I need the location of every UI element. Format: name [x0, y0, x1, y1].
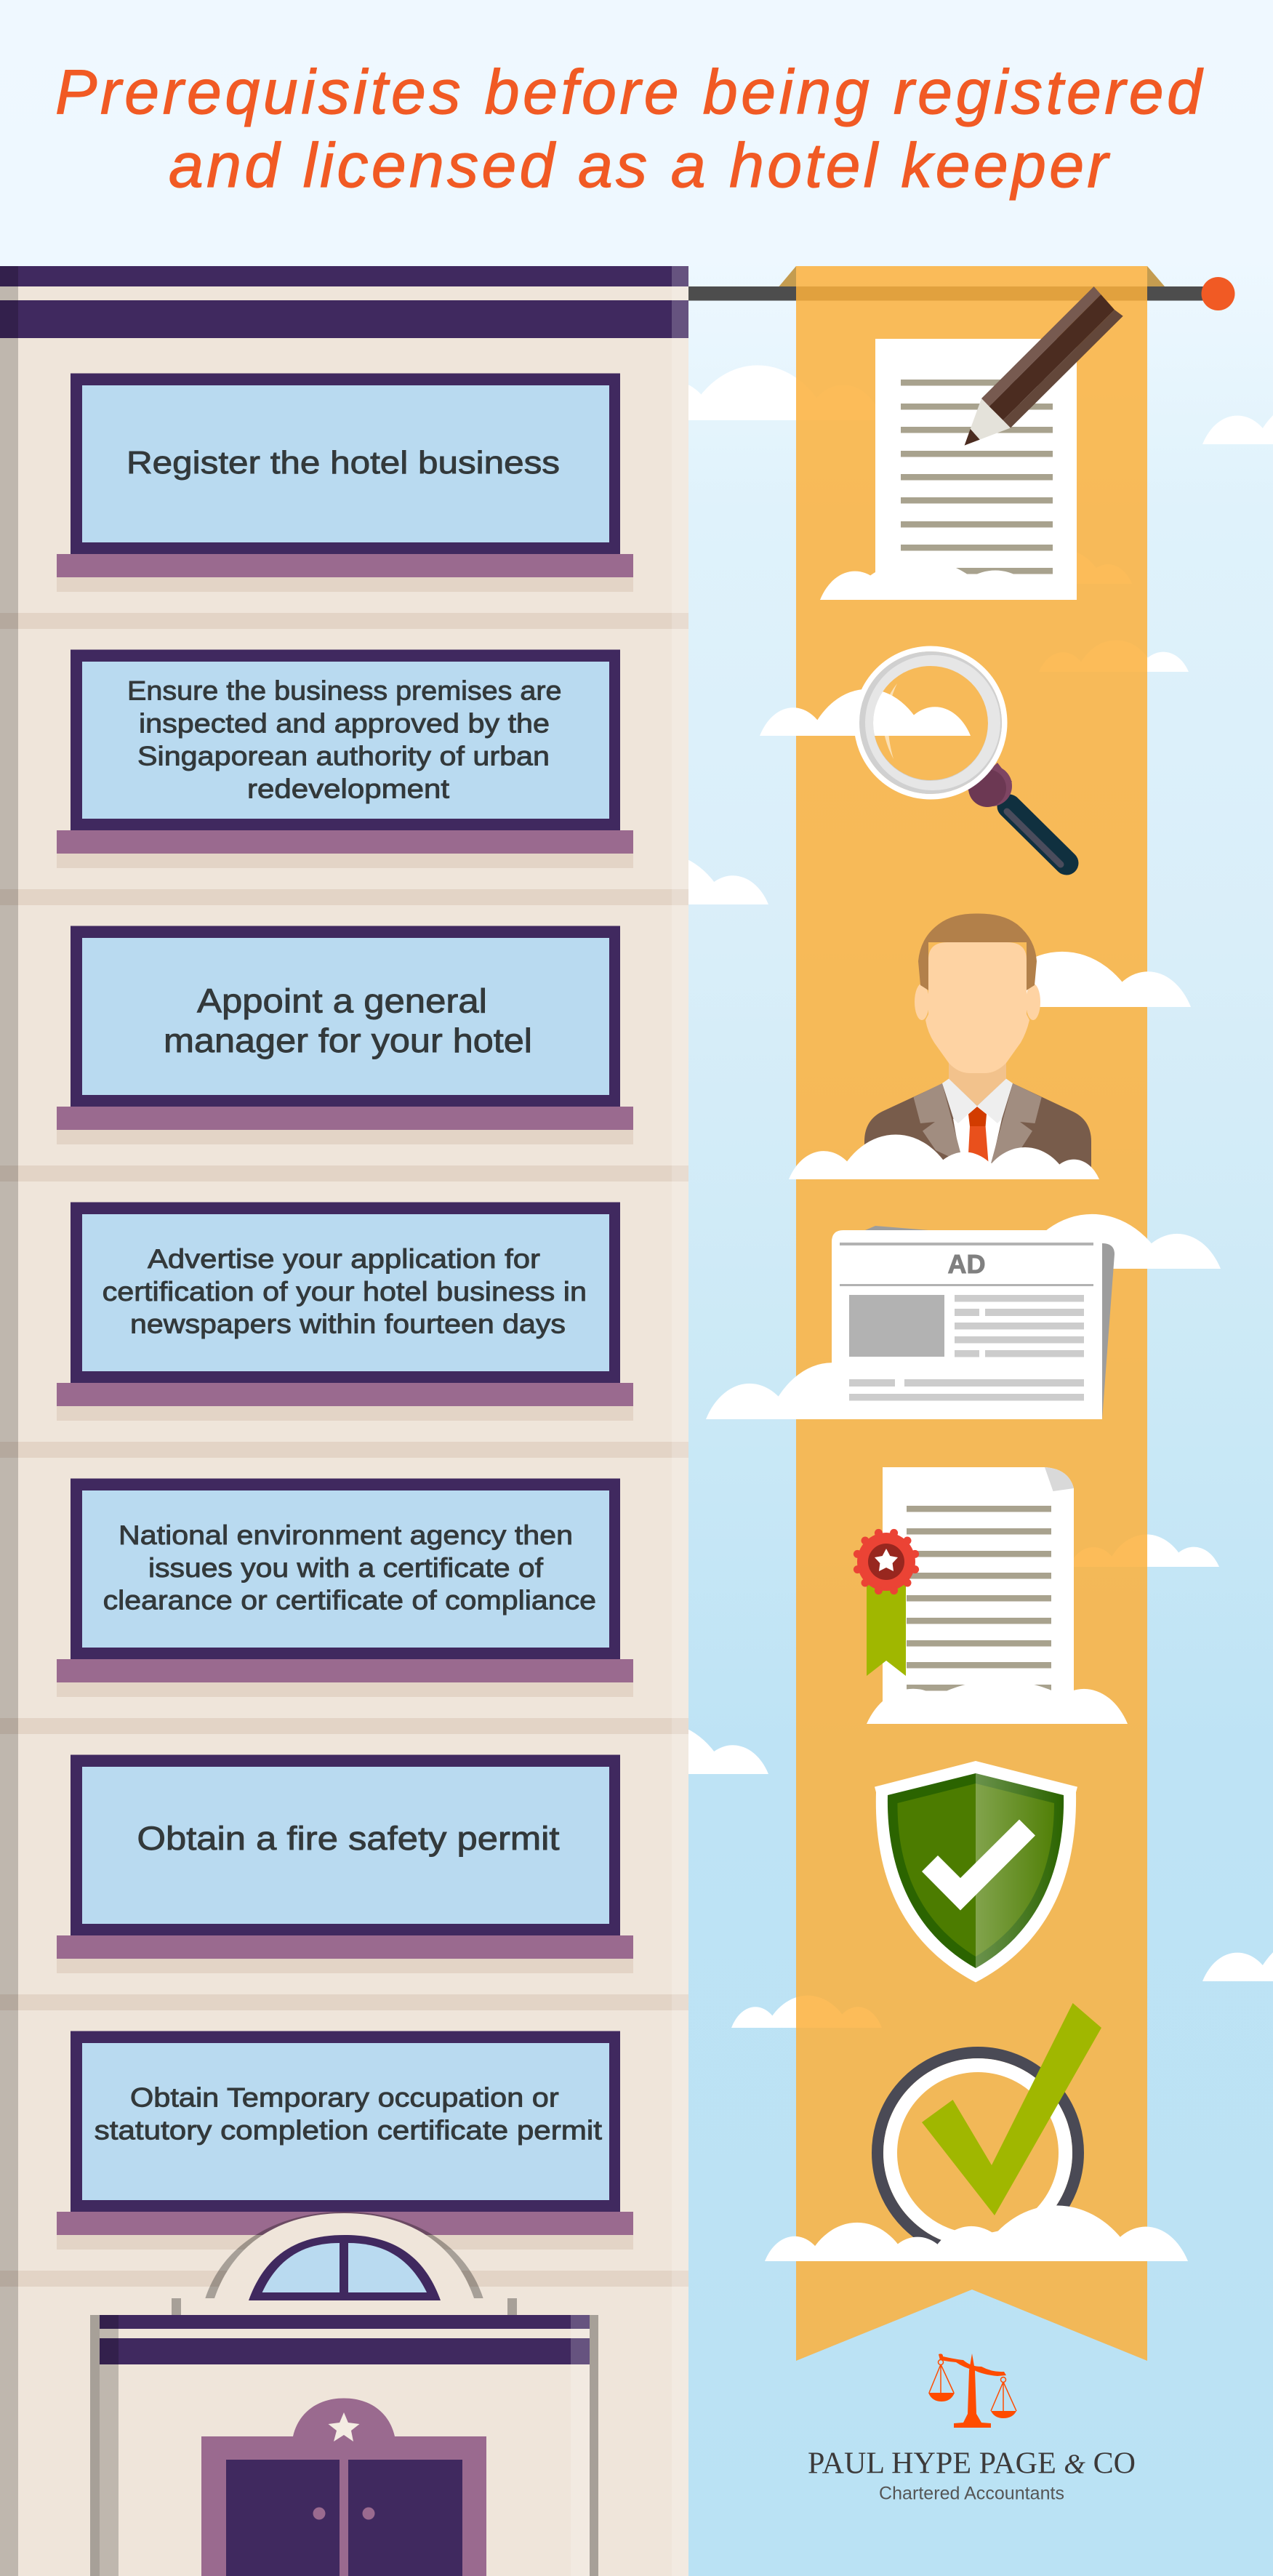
- window 5: national environment agency: issues you with a certificate of: [148, 1553, 544, 1583]
- window 6: fire safety permit: Obtain a fire safety permit: [137, 1820, 560, 1857]
- neck: [949, 1054, 1006, 1106]
- window 4: advertise application: newspapers within fourteen days: [130, 1309, 566, 1339]
- door: [201, 2398, 486, 2576]
- check mark: [922, 2003, 1101, 2215]
- window 1: register the hotel business: [57, 374, 633, 592]
- icon: approval check in ring: [765, 2003, 1188, 2261]
- icon: magnifying glass: [760, 649, 1067, 864]
- icon: certificate: [854, 1467, 1128, 1724]
- company name: PAUL HYPE PAGE & CO: [808, 2447, 1136, 2481]
- seal: [854, 1529, 919, 1594]
- window 7: temporary occupation permit: Obtain Temporary occupation or: [130, 2083, 559, 2113]
- document: [875, 339, 1077, 600]
- window 2: premises inspected: Ensure the business premises are: [127, 675, 561, 705]
- icon: door star: [329, 2412, 359, 2441]
- icon: document and pencil: [820, 286, 1123, 600]
- pencil: [965, 286, 1123, 446]
- front page: [832, 1230, 1102, 1419]
- tie: [968, 1126, 989, 1167]
- title: Prerequisites before being registered: [55, 57, 1204, 127]
- logo: scales of justice: [928, 2354, 1016, 2428]
- hair: [918, 913, 1037, 990]
- cloud in front of jacket: [789, 1134, 1099, 1179]
- window 2: premises inspected: Singaporean authority of urban: [137, 741, 550, 771]
- back page: [865, 1226, 928, 1230]
- icon: shield with check: [875, 1761, 1077, 1982]
- window 4: advertise application: certification of your hotel business in: [103, 1277, 587, 1307]
- orange banner: [796, 266, 1147, 2361]
- cloud in front of ring: [765, 2205, 1188, 2261]
- window 6: fire safety permit: [57, 1755, 633, 1973]
- window 3: appoint a general manager: [57, 926, 633, 1144]
- floor bands: [0, 613, 688, 2287]
- window 3: appoint a general manager: manager for your hotel: [164, 1022, 532, 1059]
- background clouds: [596, 365, 1273, 2028]
- window 2: premises inspected: redevelopment: [247, 774, 450, 803]
- window 4: advertise application: [57, 1203, 633, 1421]
- title: and licensed as a hotel keeper: [169, 131, 1110, 201]
- cloud under document: [820, 560, 1040, 600]
- icon: general manager: [789, 913, 1191, 1179]
- building edge shading: [0, 266, 688, 2576]
- ears: [915, 984, 929, 1020]
- window 5: national environment agency: clearance or certificate of compliance: [103, 1585, 596, 1615]
- cloud behind lens: [760, 689, 971, 736]
- cloud behind head: [987, 952, 1191, 1007]
- icon: newspaper advert: [706, 1214, 1221, 1419]
- window 4: advertise application: Advertise your application for: [148, 1244, 540, 1274]
- tagline: Chartered Accountants: [879, 2484, 1064, 2504]
- window 7: temporary occupation permit: [57, 2031, 633, 2250]
- hotel entrance: [90, 2212, 598, 2576]
- face: [925, 942, 1029, 1073]
- entrance block: [90, 2315, 598, 2576]
- window 1: register the hotel business: Register the hotel business: [127, 445, 560, 481]
- window 5: national environment agency: National environment agency then: [119, 1520, 573, 1550]
- window 2: premises inspected: [57, 650, 633, 868]
- check mark: [922, 1819, 1035, 1911]
- cloud under certificate: [867, 1680, 1128, 1724]
- jacket: [864, 1083, 1091, 1179]
- handle: [1009, 806, 1067, 863]
- window 7: temporary occupation permit: statutory completion certificate permit: [95, 2116, 603, 2146]
- shirt: [953, 1106, 1002, 1167]
- lens ring: [856, 649, 1005, 797]
- window 2: premises inspected: inspected and approved by the: [139, 708, 550, 738]
- hanging rod: [688, 266, 1234, 310]
- icon: newspaper advert: AD: [948, 1249, 986, 1279]
- ribbon: [867, 1578, 906, 1676]
- window 5: national environment agency: [57, 1479, 633, 1697]
- window 3: appoint a general manager: Appoint a general: [197, 982, 487, 1019]
- certificate page: [883, 1467, 1074, 1724]
- arched window: [249, 2235, 441, 2300]
- pediment arch: [172, 2212, 517, 2315]
- lapels: [913, 1083, 963, 1163]
- title: [55, 57, 1204, 201]
- collar: [942, 1079, 977, 1123]
- clouds behind newspaper: [1016, 1214, 1221, 1269]
